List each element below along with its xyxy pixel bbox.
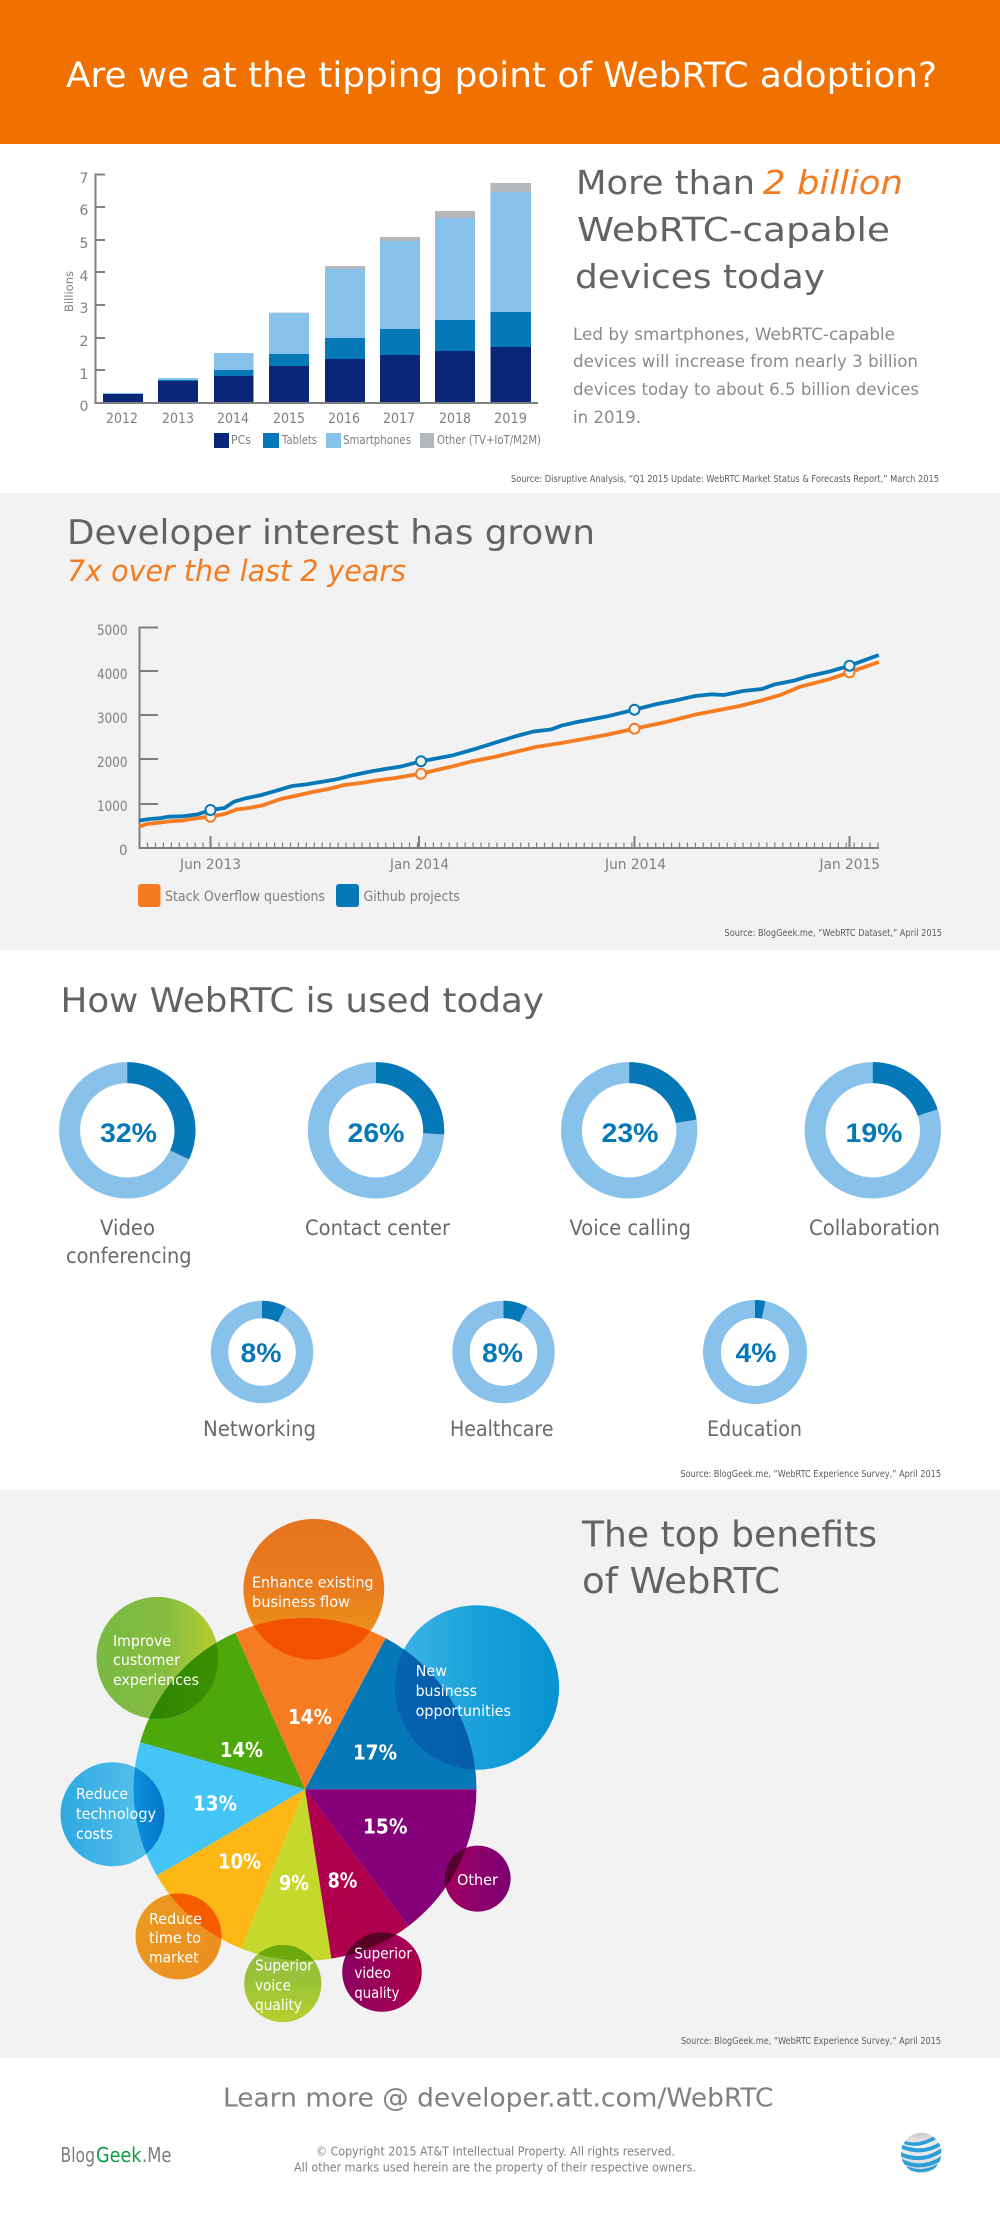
description paragraph: devices today to about 6.5 billion devices [573,380,919,400]
x axis labels: Jan 2014 [389,857,449,873]
x axis labels: 2017 [383,411,415,427]
description paragraph: Led by smartphones, WebRTC-capable [573,325,895,345]
logo: BlogGeek.Me [60,2143,172,2167]
legend: PCs [231,433,251,447]
bubble: superior video quality: Superior [354,1945,413,1963]
donut: collaboration: Collaboration [809,1216,940,1240]
donut: healthcare: 8% [482,1338,523,1368]
copyright [294,2145,696,2175]
line: Stack Overflow questions [139,662,879,827]
bubble: reduce time to market: market [149,1948,199,1966]
heading: 2 billion devices: devices today [575,257,825,296]
x axis labels: 2012 [106,411,138,427]
data point markers [206,661,854,822]
source note: Source: BlogGeek.me, “WebRTC Experience Survey,” April 2015 [681,2036,941,2047]
donut: video conferencing: Video [100,1216,155,1240]
y axis labels: 7 [80,171,88,187]
y axis labels: 0 [119,843,128,859]
pie percentage labels: 10% [218,1850,261,1874]
donut: collaboration: 19% [846,1118,902,1148]
donut: voice calling [570,1073,691,1240]
panel: header [0,0,1000,144]
bubble: reduce technology costs: costs [76,1825,113,1843]
bubble: improve customer experiences: Improve [113,1632,171,1650]
logo: BlogGeek.Me: .Me [142,2143,172,2167]
legend: Github projects [364,889,460,905]
x axis labels: Jun 2014 [604,857,666,873]
description paragraph: devices will increase from nearly 3 billion [573,352,918,372]
bubble: new business opportunities [394,1605,559,1770]
y axis title: Billions [62,271,76,312]
bars [103,183,531,403]
x axis labels: 2015 [273,411,305,427]
stacked bar chart [62,171,541,448]
x axis labels [106,411,527,427]
legend: Smartphones [343,433,411,447]
heading: 2 billion devices: WebRTC-capable [577,210,890,249]
bubble: reduce time to market: Reduce [149,1910,202,1928]
donut: contact center: 26% [348,1118,404,1148]
donut: networking: Networking [203,1417,316,1441]
panel: developer interest [0,493,1000,950]
bubble: superior video quality [342,1932,422,2012]
bubble: other: Other [457,1871,499,1889]
x axis labels: 2013 [162,411,194,427]
copyright: All other marks used herein are the property of their respective owners. [294,2161,696,2175]
bubble: other [445,1846,511,1912]
heading: top benefits: The top benefits [581,1514,877,1556]
icon: AT&T globe [900,2133,942,2173]
pie chart [134,1618,476,1961]
donut: collaboration [809,1073,940,1240]
y axis labels: 5 [80,236,88,252]
heading: 2 billion devices: 2 billion [763,163,903,202]
heading: 2 billion devices: More than [576,163,755,202]
y axis labels: 3 [80,301,88,317]
line chart [97,623,880,907]
heading: how WebRTC is used: How WebRTC is used today [60,981,544,1021]
x axis labels: 2019 [494,411,527,427]
bubble: enhance existing business flow: Enhance existing [252,1574,374,1592]
subheading: 7x growth: 7x over the last 2 years [67,554,406,588]
y axis labels [97,623,128,859]
y axis labels: 5000 [97,623,128,639]
y axis labels: 1000 [97,799,128,815]
heading: 2 billion devices [575,163,903,296]
panel: footer [62,2087,942,2174]
call to action: Learn more @ developer.att.com/WebRTC [223,2084,774,2114]
legend [138,884,460,907]
donut: voice calling: Voice calling [570,1216,691,1240]
pie percentage labels: 13% [193,1792,237,1816]
y axis labels: 4000 [97,667,128,683]
x axis labels: 2016 [328,411,360,427]
x axis labels: Jun 2013 [179,857,241,873]
axes [140,628,879,848]
bubble: new business opportunities: business [416,1682,477,1700]
bubble: new business opportunities: New [416,1662,447,1680]
donut: education [707,1309,802,1441]
donut: networking [203,1310,316,1441]
x axis labels: 2014 [217,411,249,427]
donut: contact center: Contact center [305,1216,450,1240]
bubble: improve customer experiences: customer [113,1651,181,1669]
line: Github projects [139,655,879,821]
pie percentage labels [193,1705,408,1895]
y axis labels: 6 [80,203,89,219]
panel: WebRTC-capable devices [0,144,1000,493]
donut: education: Education [707,1417,802,1441]
title: Are we at the tipping point of WebRTC adoption? [66,56,937,96]
y axis labels: 2 [80,334,88,350]
pie percentage labels: 8% [328,1868,357,1892]
x axis labels [179,857,880,873]
heading: developer interest: Developer interest has grown [67,513,595,553]
donut: healthcare [450,1310,554,1441]
pie percentage labels: 14% [288,1705,332,1729]
y axis labels: 4 [80,269,89,285]
bubble: reduce technology costs: Reduce [76,1785,128,1803]
panel: how WebRTC is used [0,950,1000,1490]
logo: BlogGeek.Me: Blog [60,2143,95,2167]
donut: networking: 8% [240,1338,282,1368]
panel: top benefits [0,1490,1000,2058]
bubble: improve customer experiences: experiences [113,1671,199,1689]
heading: top benefits [581,1514,877,1602]
bubble: improve customer experiences [96,1597,218,1719]
x axis labels: Jan 2015 [819,857,880,873]
bubble: reduce technology costs: technology [76,1805,156,1823]
bubble: reduce time to market [136,1893,222,1979]
pie percentage labels: 9% [279,1871,309,1895]
y axis labels [80,171,89,415]
x axis labels: 2018 [439,411,471,427]
source note: Source: BlogGeek.me, “WebRTC Dataset,” April 2015 [724,928,942,939]
donut: video conferencing: conferencing [66,1244,192,1268]
legend: Tablets [281,433,317,447]
bubble: new business opportunities: opportunities [416,1702,511,1720]
bubble: superior voice quality: voice [255,1977,291,1995]
bubble: superior video quality: video [354,1964,391,1982]
bubble: enhance existing business flow: business flow [252,1593,350,1611]
y axis labels: 3000 [97,711,128,727]
bubble: reduce technology costs [60,1762,164,1866]
heading: top benefits: of WebRTC [582,1561,780,1602]
donut: video conferencing [66,1073,192,1268]
description paragraph: in 2019. [573,408,641,428]
bubble: superior voice quality [244,1945,321,2022]
copyright: © Copyright 2015 AT&T Intellectual Property. All rights reserved. [316,2145,675,2159]
bubble: superior voice quality: quality [255,1996,302,2014]
donut: education: 4% [736,1338,776,1368]
pie percentage labels: 15% [363,1814,408,1838]
bubble: enhance existing business flow [243,1519,384,1660]
legend [214,433,541,448]
y axis labels: 0 [80,399,88,415]
donut: contact center [305,1073,450,1240]
description paragraph [573,325,919,428]
donut: video conferencing: 32% [100,1118,157,1148]
source note: Source: BlogGeek.me, “WebRTC Experience Survey,” April 2015 [680,1469,941,1480]
bubble: reduce time to market: time to [149,1929,201,1947]
donut: healthcare: Healthcare [450,1417,554,1441]
y axis labels: 2000 [97,755,128,771]
pie percentage labels: 14% [220,1738,263,1762]
legend: Other (TV+IoT/M2M) [437,433,541,447]
logo: BlogGeek.Me: Geek [96,2143,142,2167]
y axis labels: 1 [80,367,88,383]
bubble: superior video quality: quality [354,1984,400,2002]
source note: Source: Disruptive Analysis, “Q1 2015 Update: WebRTC Market Status & Forecasts Report,” March 2015 [511,474,939,485]
bubble: superior voice quality: Superior [255,1957,314,1975]
legend: Stack Overflow questions [165,889,325,905]
pie percentage labels: 17% [353,1740,397,1764]
donut: voice calling: 23% [602,1118,658,1148]
